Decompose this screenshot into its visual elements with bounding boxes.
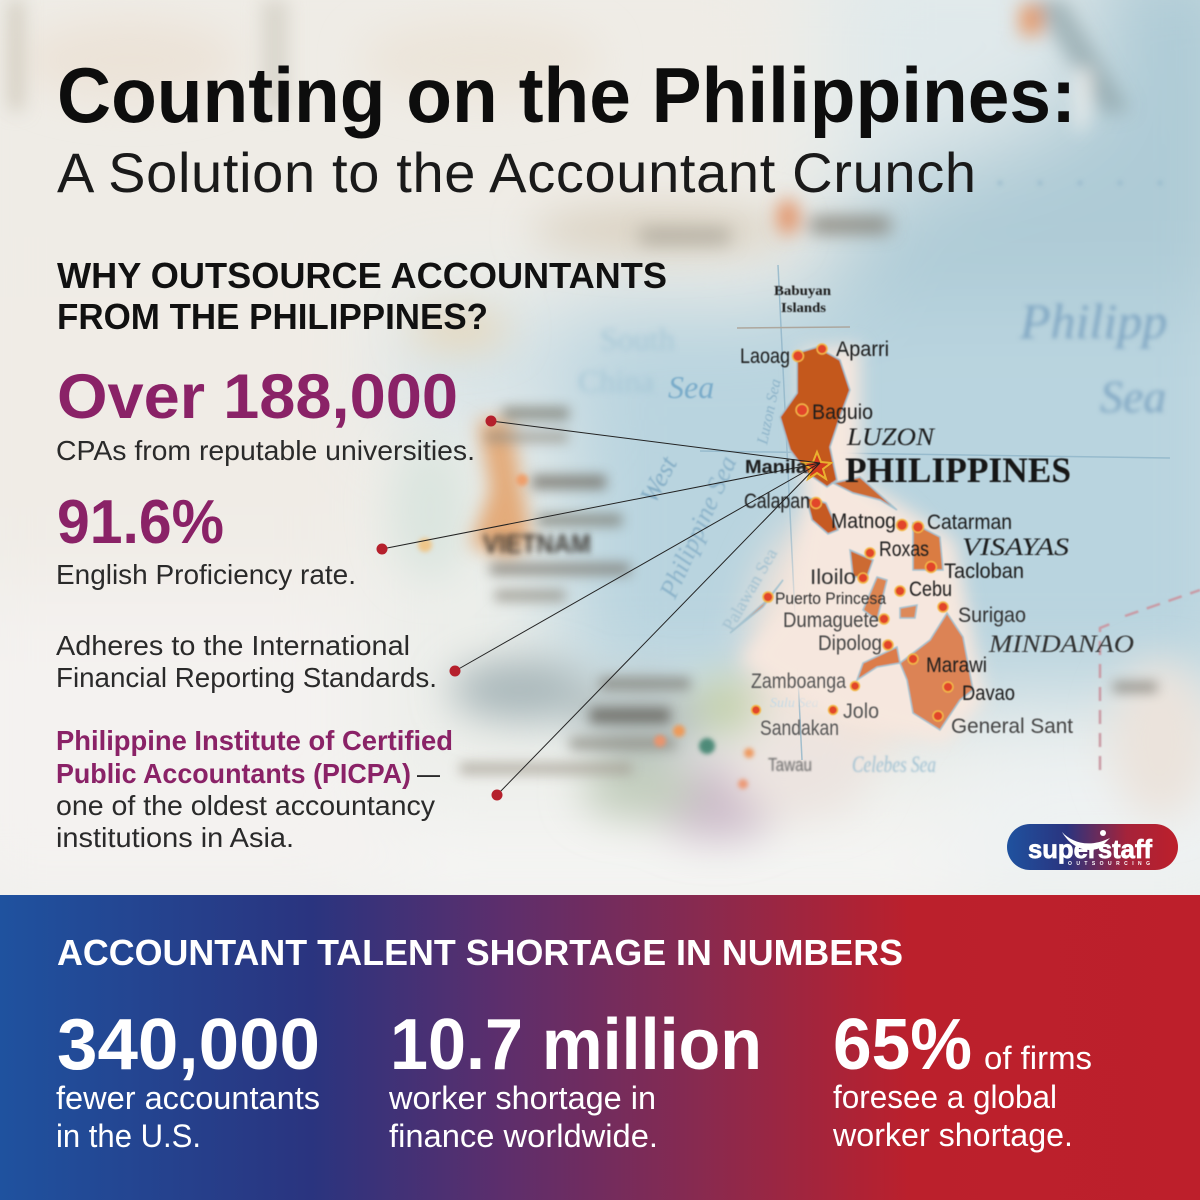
map: region and city labels: VISAYAS (962, 534, 1070, 561)
map: region and city labels: Celebes Sea (852, 752, 936, 777)
logo: superstaff outsourcing: superstaff (1028, 834, 1152, 864)
stat: PICPA: institutions in Asia. (56, 822, 294, 853)
background: blurred map photograph: Philippine Sea (654, 451, 742, 603)
stat: 10.7 million: finance worldwide. (389, 1118, 658, 1154)
logo: superstaff outsourcing (1007, 824, 1178, 870)
map: island landmasses (730, 347, 973, 730)
stat: 10.7 million: 10.7 million (390, 1005, 762, 1085)
background: blurred map photograph: Sulu Sea (770, 696, 819, 711)
map: Manila star (803, 452, 831, 479)
map: region and city labels: LUZON (846, 424, 935, 451)
background: blurred map photograph: China (578, 363, 654, 399)
map: region and city labels: Dipolog (818, 632, 882, 655)
stat: 91.6% English proficiency: English Proficiency rate. (56, 559, 356, 590)
map: region and city labels: Roxas (879, 538, 929, 561)
map: region and city labels: Baguio (812, 401, 873, 424)
map: region and city labels: Cebu (909, 578, 952, 601)
map: region and city labels: Islands (781, 301, 827, 316)
stat: PICPA: one of the oldest accountancy (56, 790, 435, 821)
stat: 340,000: in the U.S. (56, 1118, 201, 1154)
stat: 91.6% English proficiency (56, 488, 356, 590)
subtitle: A Solution to the Accountant Crunch (57, 141, 976, 204)
map: Philippines archipelago (700, 265, 1200, 777)
panel: talent shortage band (0, 895, 1200, 1200)
background: blurred map photograph: West (635, 451, 683, 508)
stat: 91.6% English proficiency: 91.6% (57, 488, 224, 557)
stat: 340,000 (56, 1005, 320, 1154)
map: region and city labels: Calapan (744, 490, 810, 513)
stat: PICPA: — (417, 758, 440, 789)
map: region and city labels: Puerto Princesa (775, 589, 886, 608)
connector end dots (376, 416, 502, 800)
connector lines to Manila (382, 421, 820, 795)
stat: 188,000 CPAs (56, 362, 475, 466)
map: region and city labels: Davao (962, 682, 1015, 705)
map: region and city labels: Catarman (927, 511, 1012, 534)
map: region and city labels: Surigao (958, 604, 1026, 627)
stat: 65% of firms: foresee a global (833, 1079, 1057, 1115)
map: region and city labels: Manila (745, 457, 808, 477)
map: region and city labels: Aparri (836, 338, 889, 361)
logo: superstaff outsourcing: OUTSOURCING (1068, 861, 1150, 867)
stat: IFRS: Adheres to the International (56, 630, 410, 661)
stat: 340,000: 340,000 (57, 1005, 320, 1085)
heading: why outsource (57, 255, 667, 337)
map: region and city labels: Babuyan (774, 284, 831, 299)
stat: 65% of firms (832, 1005, 1092, 1153)
map: region and city labels: Dumaguete (783, 609, 879, 632)
map: region and city labels: Iloilo (810, 566, 856, 589)
stat: 65% of firms: worker shortage. (832, 1117, 1073, 1153)
background: blurred map photograph: South (600, 321, 675, 357)
stat: 188,000 CPAs: Over 188,000 (57, 362, 458, 432)
stat: IFRS: Financial Reporting Standards. (56, 662, 437, 693)
map: sea grid lines (700, 265, 1170, 760)
stat: 10.7 million: worker shortage in (388, 1080, 656, 1116)
map: region and city labels (740, 284, 1134, 777)
stat: PICPA: Public Accountants (PICPA) (56, 758, 411, 789)
map: region and city labels: General Sant (951, 715, 1073, 738)
map: region and city labels: Tacloban (944, 560, 1024, 583)
map: region and city labels: Zamboanga (751, 670, 846, 693)
stat: IFRS (56, 630, 437, 693)
map: region and city labels: Jolo (843, 700, 879, 723)
stat: PICPA: Philippine Institute of Certified (56, 725, 453, 756)
map: region and city labels: Matnog (831, 510, 896, 533)
map: boundary dashes (1100, 590, 1200, 770)
stat: 188,000 CPAs: CPAs from reputable universities. (56, 435, 475, 466)
background: blurred map photograph (0, 0, 1200, 920)
map: region and city labels: MINDANAO (988, 631, 1134, 658)
stat: PICPA (56, 725, 453, 853)
map: PHILIPPINES label: PHILIPPINES (845, 450, 1071, 490)
band heading: ACCOUNTANT TALENT SHORTAGE IN NUMBERS (57, 932, 903, 973)
background: blurred map photograph: Palawan Sea (718, 545, 781, 634)
map: region and city labels: Marawi (926, 654, 987, 677)
map: pale coastal glow (740, 345, 985, 745)
background: blurred map photograph: Sea (1100, 371, 1166, 422)
background: blurred map photograph: Philipp (1019, 293, 1167, 349)
stat: 340,000: fewer accountants (56, 1080, 320, 1116)
stat: 10.7 million (388, 1005, 762, 1154)
heading: why outsource: WHY OUTSOURCE ACCOUNTANTS (57, 255, 667, 296)
background: blurred map photograph: Sea (668, 369, 714, 405)
stat: 65% of firms: of firms (984, 1040, 1092, 1076)
background: blurred map photograph: VIETNAM (483, 529, 591, 559)
stat: 65% of firms: 65% (833, 1005, 972, 1085)
map: city markers (752, 344, 953, 721)
heading: why outsource: FROM THE PHILIPPINES? (57, 296, 488, 337)
map: region and city labels: Sandakan (760, 717, 839, 740)
title: Counting on the Philippines: (57, 51, 1076, 139)
map: region and city labels: Tawau (768, 755, 812, 775)
background: blurred map photograph: Luzon Sea (754, 378, 785, 447)
map: region and city labels: Laoag (740, 345, 790, 368)
